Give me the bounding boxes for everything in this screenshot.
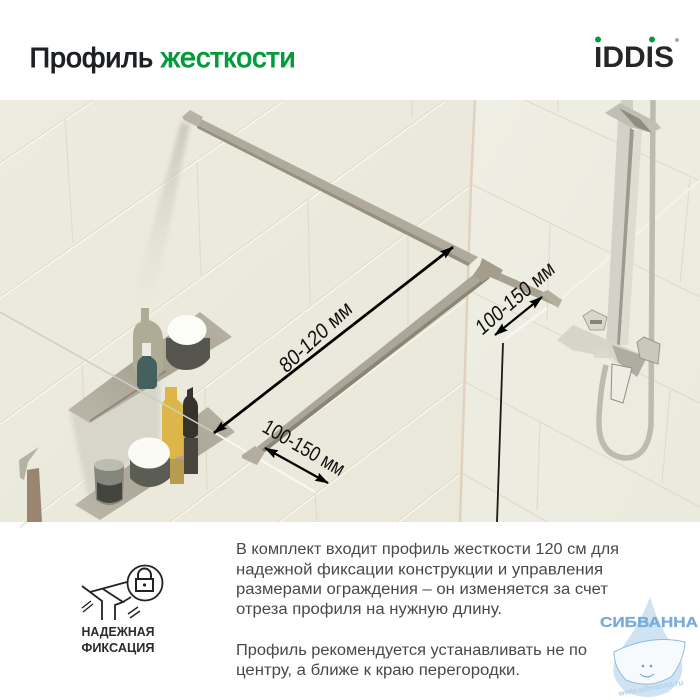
text block: description [236, 541, 619, 679]
top bracket [605, 103, 661, 133]
knob right [637, 337, 660, 364]
text block: description: отреза профиля на нужную длину. [236, 601, 502, 618]
tile grout lines [0, 100, 700, 528]
upper shelf items [133, 308, 210, 389]
stiffening profile: lower rod [242, 275, 490, 465]
text block: description: Профиль рекомендуется устанавливать не по [236, 642, 587, 659]
mixer body [557, 325, 647, 377]
dropper bottle [137, 343, 157, 389]
logo: IDDIS: IDDIS [594, 41, 674, 74]
lever [611, 364, 632, 403]
arrow: lower 100-150 mm [265, 448, 328, 483]
yellow bottle [162, 387, 183, 459]
rod shadow on wall [130, 122, 190, 310]
text block: description: центру, а ближе к краю перегородки. [236, 662, 520, 679]
watermark: sibvanna [600, 597, 698, 698]
rail dark strip [617, 128, 634, 345]
jar [130, 458, 170, 487]
icon: padlock badge [128, 566, 162, 600]
right segment [497, 272, 562, 307]
icon caption: НАДЕЖНАЯ [82, 625, 155, 639]
connector [473, 258, 503, 282]
glass edge [0, 180, 700, 522]
text block: description: размерами ограждения – он изменяется за счет [236, 581, 608, 598]
small nozzle [594, 349, 609, 358]
title: Профиль жесткости [30, 42, 296, 73]
panel: bathroom photo [0, 100, 700, 528]
shower system [557, 100, 661, 458]
arrow: right 100-150 mm [495, 297, 542, 335]
towel holder [19, 447, 42, 522]
black bottle [183, 387, 198, 438]
hose [599, 100, 653, 458]
rail [606, 118, 632, 345]
glass cup [94, 461, 124, 505]
rail reflection [620, 130, 642, 345]
reflection [170, 459, 184, 484]
text block: description: В комплект входит профиль жесткости 120 см для [236, 541, 619, 558]
watermark: sibvanna: www.sibvanna.ru [617, 678, 684, 698]
jar [166, 338, 210, 370]
stiffening profile: upper rod [182, 110, 562, 308]
text block: description: надежной фиксации конструкции и управления [236, 562, 603, 578]
arrow: 80-120 mm [214, 247, 453, 433]
label: lower 100-150 mm: 100-150 мм [258, 415, 349, 481]
knob top [583, 310, 607, 330]
shower rod [621, 100, 633, 122]
icon caption second line: ФИКСАЦИЯ [82, 641, 155, 655]
shelf shadow [70, 380, 160, 497]
wall mount [182, 110, 203, 127]
oil bottle [133, 308, 163, 379]
wall mount [242, 446, 265, 465]
watermark: sibvanna: СИБВАННА [600, 614, 698, 631]
lower shelf items [94, 387, 198, 505]
label: 80-120 mm: 80-120 мм [276, 296, 356, 378]
icon: secure fixation [82, 566, 162, 639]
lower shelf [75, 407, 235, 520]
upper shelf [68, 312, 232, 423]
label: right 100-150 mm: 100-150 мм [472, 257, 559, 340]
